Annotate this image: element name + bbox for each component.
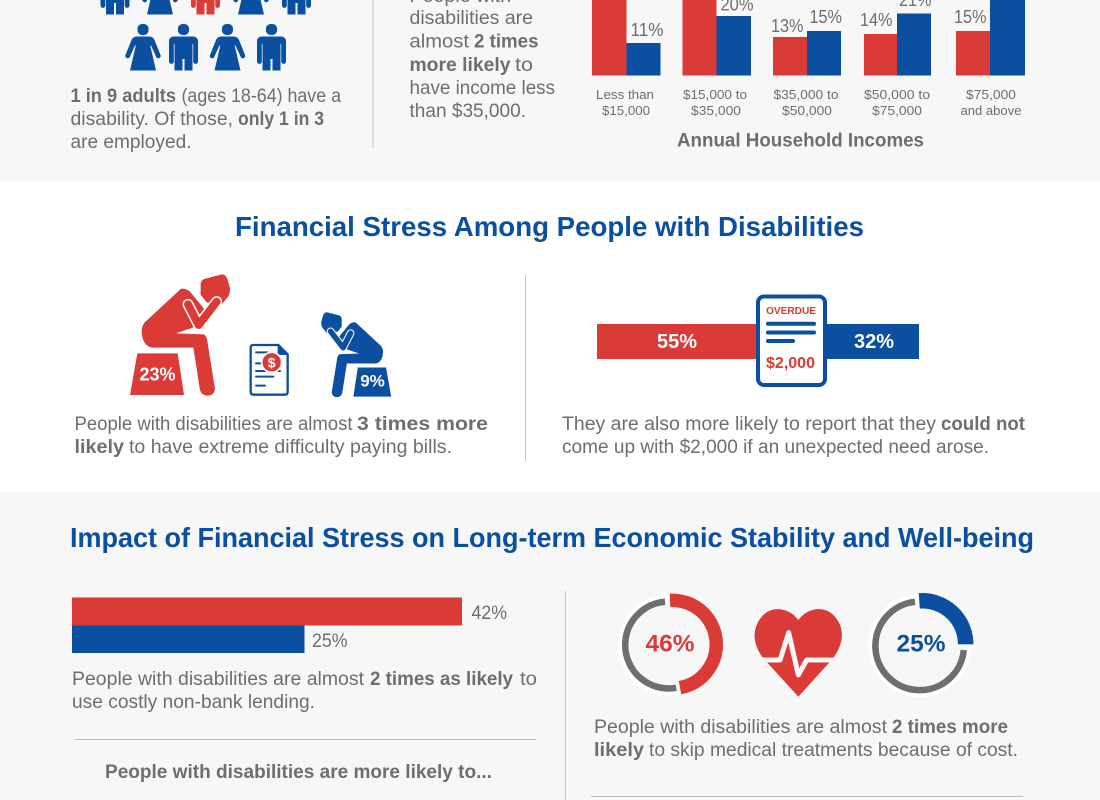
label: 9 percent: 9% [360, 372, 385, 390]
text: income statistic: 2 times [474, 32, 538, 52]
text: non-bank lending: 2 times as likely [370, 669, 513, 690]
text: income statistic: have income less [410, 78, 555, 99]
text: unexpected need: come up with $2,000 if an unexpected need arose. [562, 437, 989, 458]
text: income statistic: than $35,000. [410, 101, 526, 122]
text: extreme difficulty paying bills [74, 414, 488, 458]
bar chart: annual household incomes: $15,000 to [683, 87, 747, 102]
comparison bar: could not raise 2000: 55% [657, 331, 697, 353]
donut chart: 46 percent [620, 596, 717, 694]
bar chart: annual household incomes: 15% [954, 7, 986, 27]
text: employment statistic: (ages 18-64) have a [182, 86, 341, 107]
icon: red stressed person [130, 274, 230, 396]
comparison bar: could not raise 2000: 32% [854, 331, 894, 353]
panel: financial stress [0, 181, 1100, 492]
bar chart: annual household incomes: $75,000 [966, 87, 1016, 102]
label: 23 percent: 23% [139, 364, 176, 384]
text: employment statistic: only 1 in 3 [238, 109, 324, 130]
text: employment statistic: disability. Of those, [70, 109, 233, 130]
text: unexpected need: They are also more likely to report that they [562, 414, 937, 435]
text: non-bank lending: use costly non-bank lending. [72, 692, 315, 713]
bar chart: non-bank lending: 42% [472, 603, 507, 624]
text: extreme difficulty paying bills: 3 times more [357, 414, 488, 435]
icon: overdue bill [758, 296, 825, 385]
bar chart: annual household incomes: 13% [771, 16, 804, 36]
icon: people row two [125, 24, 286, 70]
icon: bill document [251, 345, 288, 395]
text: extreme difficulty paying bills: People with disabilities are almost [74, 414, 353, 435]
text: skip medical treatments: 2 times more [892, 717, 1008, 738]
text: employment statistic [70, 86, 341, 153]
text: non-bank lending: to [520, 669, 537, 690]
text: extreme difficulty paying bills: to have extreme difficulty paying bills. [129, 437, 452, 458]
donut chart: 25 percent: 25% [896, 630, 946, 658]
heading: financial stress: Financial Stress Among People with Disabilities [235, 211, 864, 242]
text: income statistic: disabilities are [410, 8, 533, 29]
icon: overdue bill: OVERDUE [766, 305, 816, 317]
bar chart: non-bank lending [72, 598, 507, 653]
bar chart: annual household incomes: $50,000 [782, 103, 832, 118]
text: income statistic: more likely [410, 55, 511, 76]
text: employment statistic: 1 in 9 adults [70, 86, 176, 107]
panel: employment and income [0, 0, 1100, 181]
bar chart: annual household incomes: $50,000 to [864, 87, 930, 102]
bar chart: annual household incomes: 14% [860, 10, 892, 30]
icon: blue stressed person [321, 312, 391, 397]
bar chart: annual household incomes [592, 0, 1025, 152]
bar chart: annual household incomes: 11% [630, 20, 664, 40]
subheading: more likely to: People with disabilities are more likely to... [105, 762, 492, 783]
text: skip medical treatments: People with disabilities are almost [594, 717, 888, 738]
text: income statistic [410, 0, 555, 122]
bar chart: annual household incomes: Less than [596, 87, 654, 102]
icon: bill document: $ [268, 354, 276, 370]
text: non-bank lending [72, 669, 537, 713]
text: skip medical treatments [594, 717, 1018, 761]
comparison bar: could not raise 2000 [597, 296, 919, 385]
bar chart: annual household incomes: $15,000 [602, 103, 650, 118]
text: unexpected need [562, 414, 1026, 458]
chart axis title: Annual Household Incomes [677, 130, 924, 152]
text: income statistic: to [515, 55, 533, 76]
bar chart: annual household incomes: $75,000 [872, 103, 922, 118]
panel: long-term impact [0, 492, 1100, 800]
icon: people row one [100, 0, 311, 14]
donut chart: 25 percent [870, 596, 969, 695]
bar chart: non-bank lending: 25% [312, 631, 348, 652]
heading: long-term impact: Impact of Financial Stress on Long-term Economic Stability and Well-being [70, 522, 1034, 553]
text: income statistic: almost [410, 32, 470, 52]
text: extreme difficulty paying bills: likely [74, 437, 124, 458]
text: employment statistic: are employed. [70, 132, 192, 153]
bar chart: annual household incomes: 15% [810, 7, 842, 27]
bar chart: annual household incomes: $35,000 [691, 103, 741, 118]
bar chart: annual household incomes: and above [960, 103, 1022, 118]
donut chart: 46 percent: 46% [646, 630, 694, 658]
text: non-bank lending: People with disabilities are almost [72, 669, 365, 690]
text: unexpected need: could not [941, 414, 1026, 435]
icon: heart with pulse [755, 609, 842, 697]
text: skip medical treatments: to skip medical treatments because of cost. [649, 740, 1018, 761]
text: skip medical treatments: likely [594, 740, 644, 761]
icon: overdue bill: $2,000 [766, 355, 815, 372]
bar chart: annual household incomes: $35,000 to [774, 87, 838, 102]
